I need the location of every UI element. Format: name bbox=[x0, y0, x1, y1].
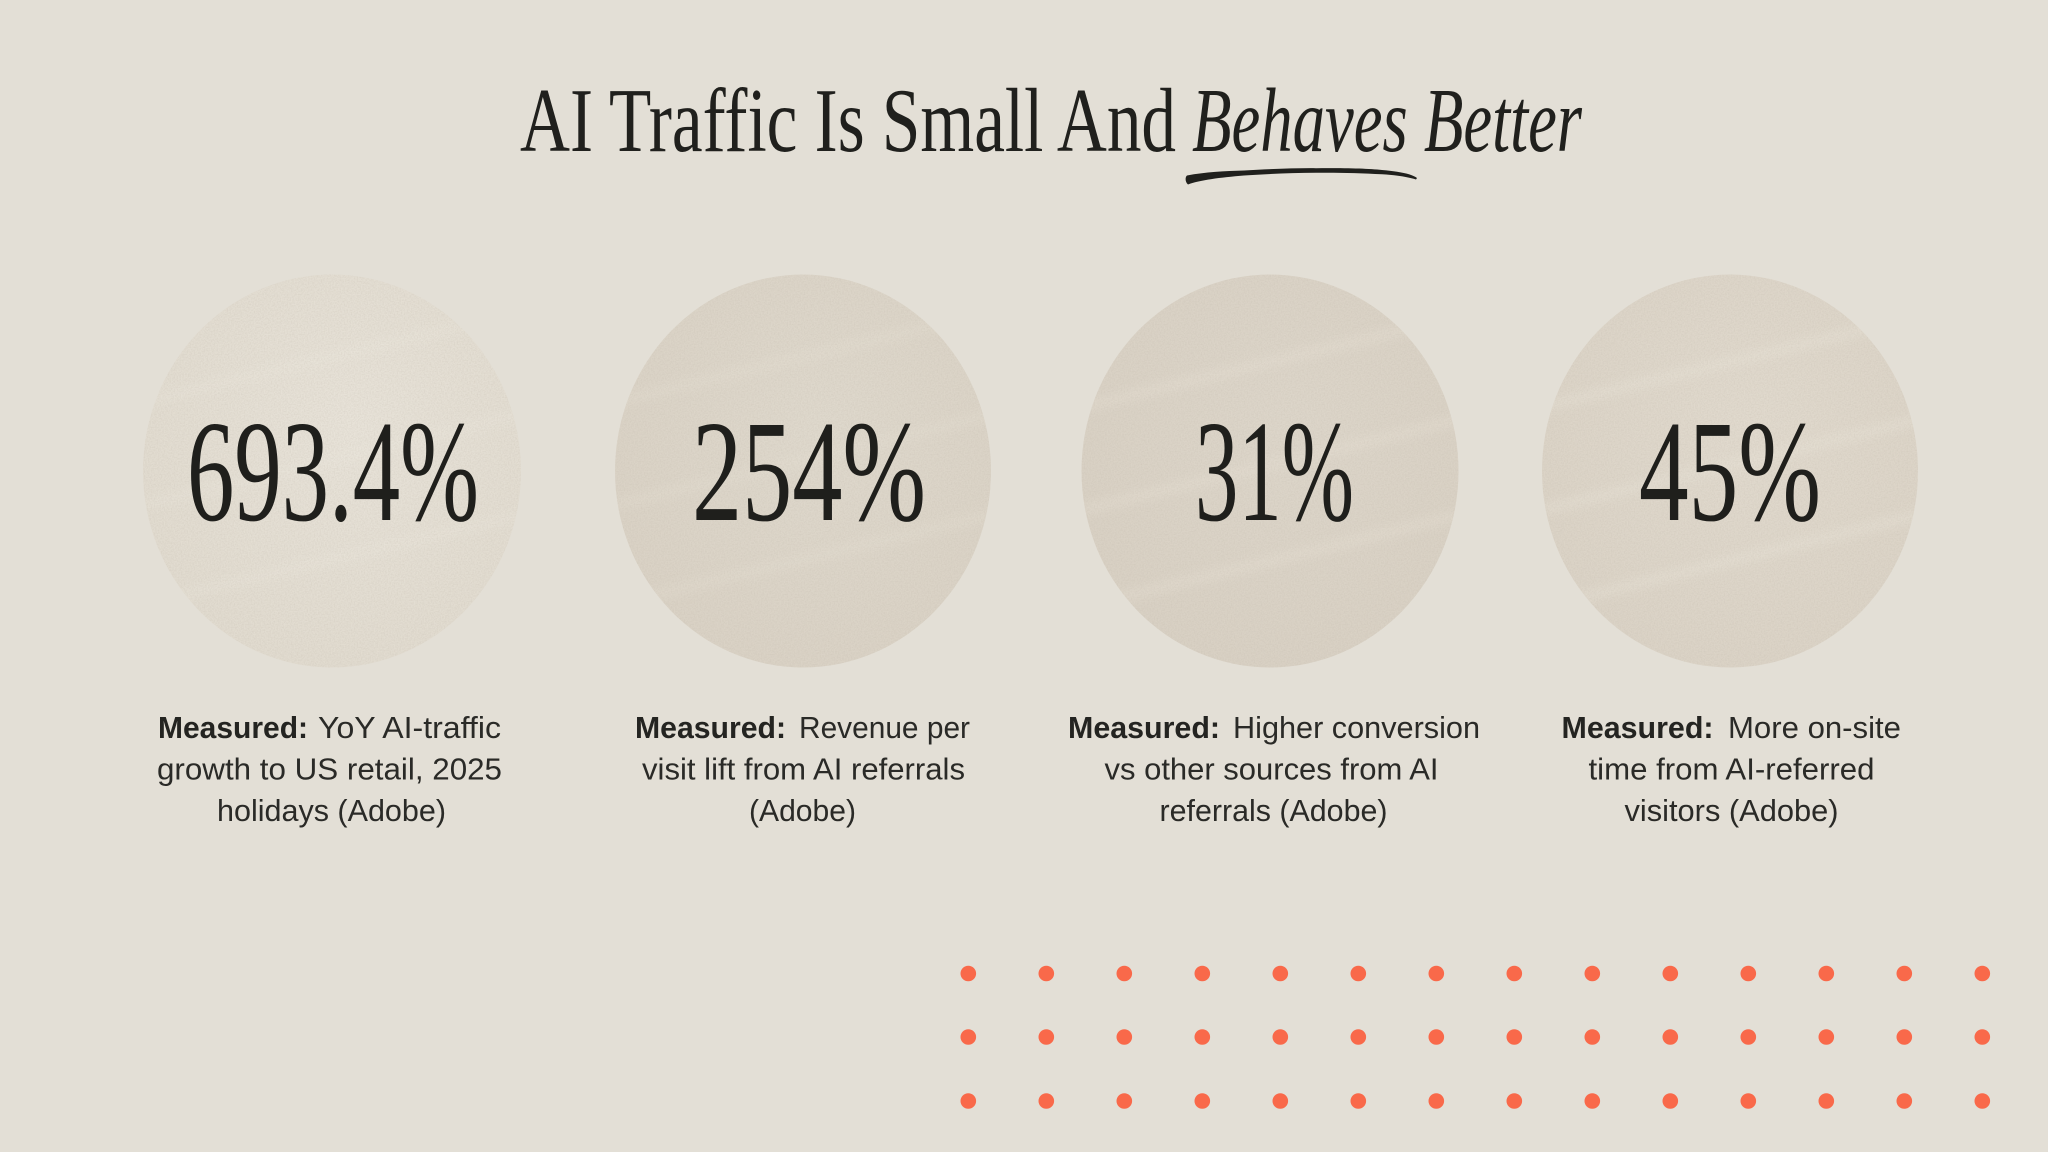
value: 693.4% bbox=[187, 392, 479, 552]
title underline stroke bbox=[1186, 168, 1417, 184]
caption bbox=[157, 710, 502, 828]
stat panel: 45% bbox=[1542, 274, 1918, 828]
caption: (Adobe) bbox=[749, 793, 856, 828]
caption: Measured: bbox=[1068, 710, 1220, 745]
caption: Revenue per bbox=[799, 710, 970, 745]
value: 254% bbox=[692, 392, 926, 552]
caption: Measured: bbox=[158, 710, 308, 745]
title: Behaves Better bbox=[1192, 70, 1582, 171]
caption: growth to US retail, 2025 bbox=[157, 752, 502, 786]
circle 2 bbox=[615, 274, 991, 668]
caption: Measured: bbox=[1562, 710, 1714, 745]
value: 45% bbox=[1639, 392, 1821, 552]
circle 4 bbox=[1542, 274, 1918, 668]
caption: Measured: bbox=[635, 710, 786, 745]
caption: YoY AI-traffic bbox=[318, 710, 501, 745]
caption bbox=[1068, 710, 1480, 828]
caption: More on-site bbox=[1728, 710, 1901, 745]
caption: visit lift from AI referrals bbox=[642, 752, 965, 786]
stat panel: 693.4% bbox=[143, 274, 521, 828]
stat panel: 31% bbox=[1068, 274, 1480, 828]
caption: Higher conversion bbox=[1233, 710, 1480, 745]
circle 3 bbox=[1081, 274, 1459, 668]
caption: visitors (Adobe) bbox=[1624, 793, 1838, 828]
value: 31% bbox=[1195, 392, 1354, 552]
caption: time from AI-referred bbox=[1588, 752, 1874, 786]
caption: referrals (Adobe) bbox=[1160, 793, 1388, 828]
decorative coral dot grid bbox=[960, 966, 1990, 1109]
title: AI Traffic Is Small And bbox=[520, 70, 1176, 171]
circle 1 bbox=[143, 274, 521, 668]
caption: holidays (Adobe) bbox=[217, 793, 446, 828]
caption bbox=[1562, 710, 1901, 828]
caption bbox=[635, 710, 970, 828]
caption: vs other sources from AI bbox=[1104, 752, 1438, 786]
stat panel: 254% bbox=[615, 274, 991, 828]
